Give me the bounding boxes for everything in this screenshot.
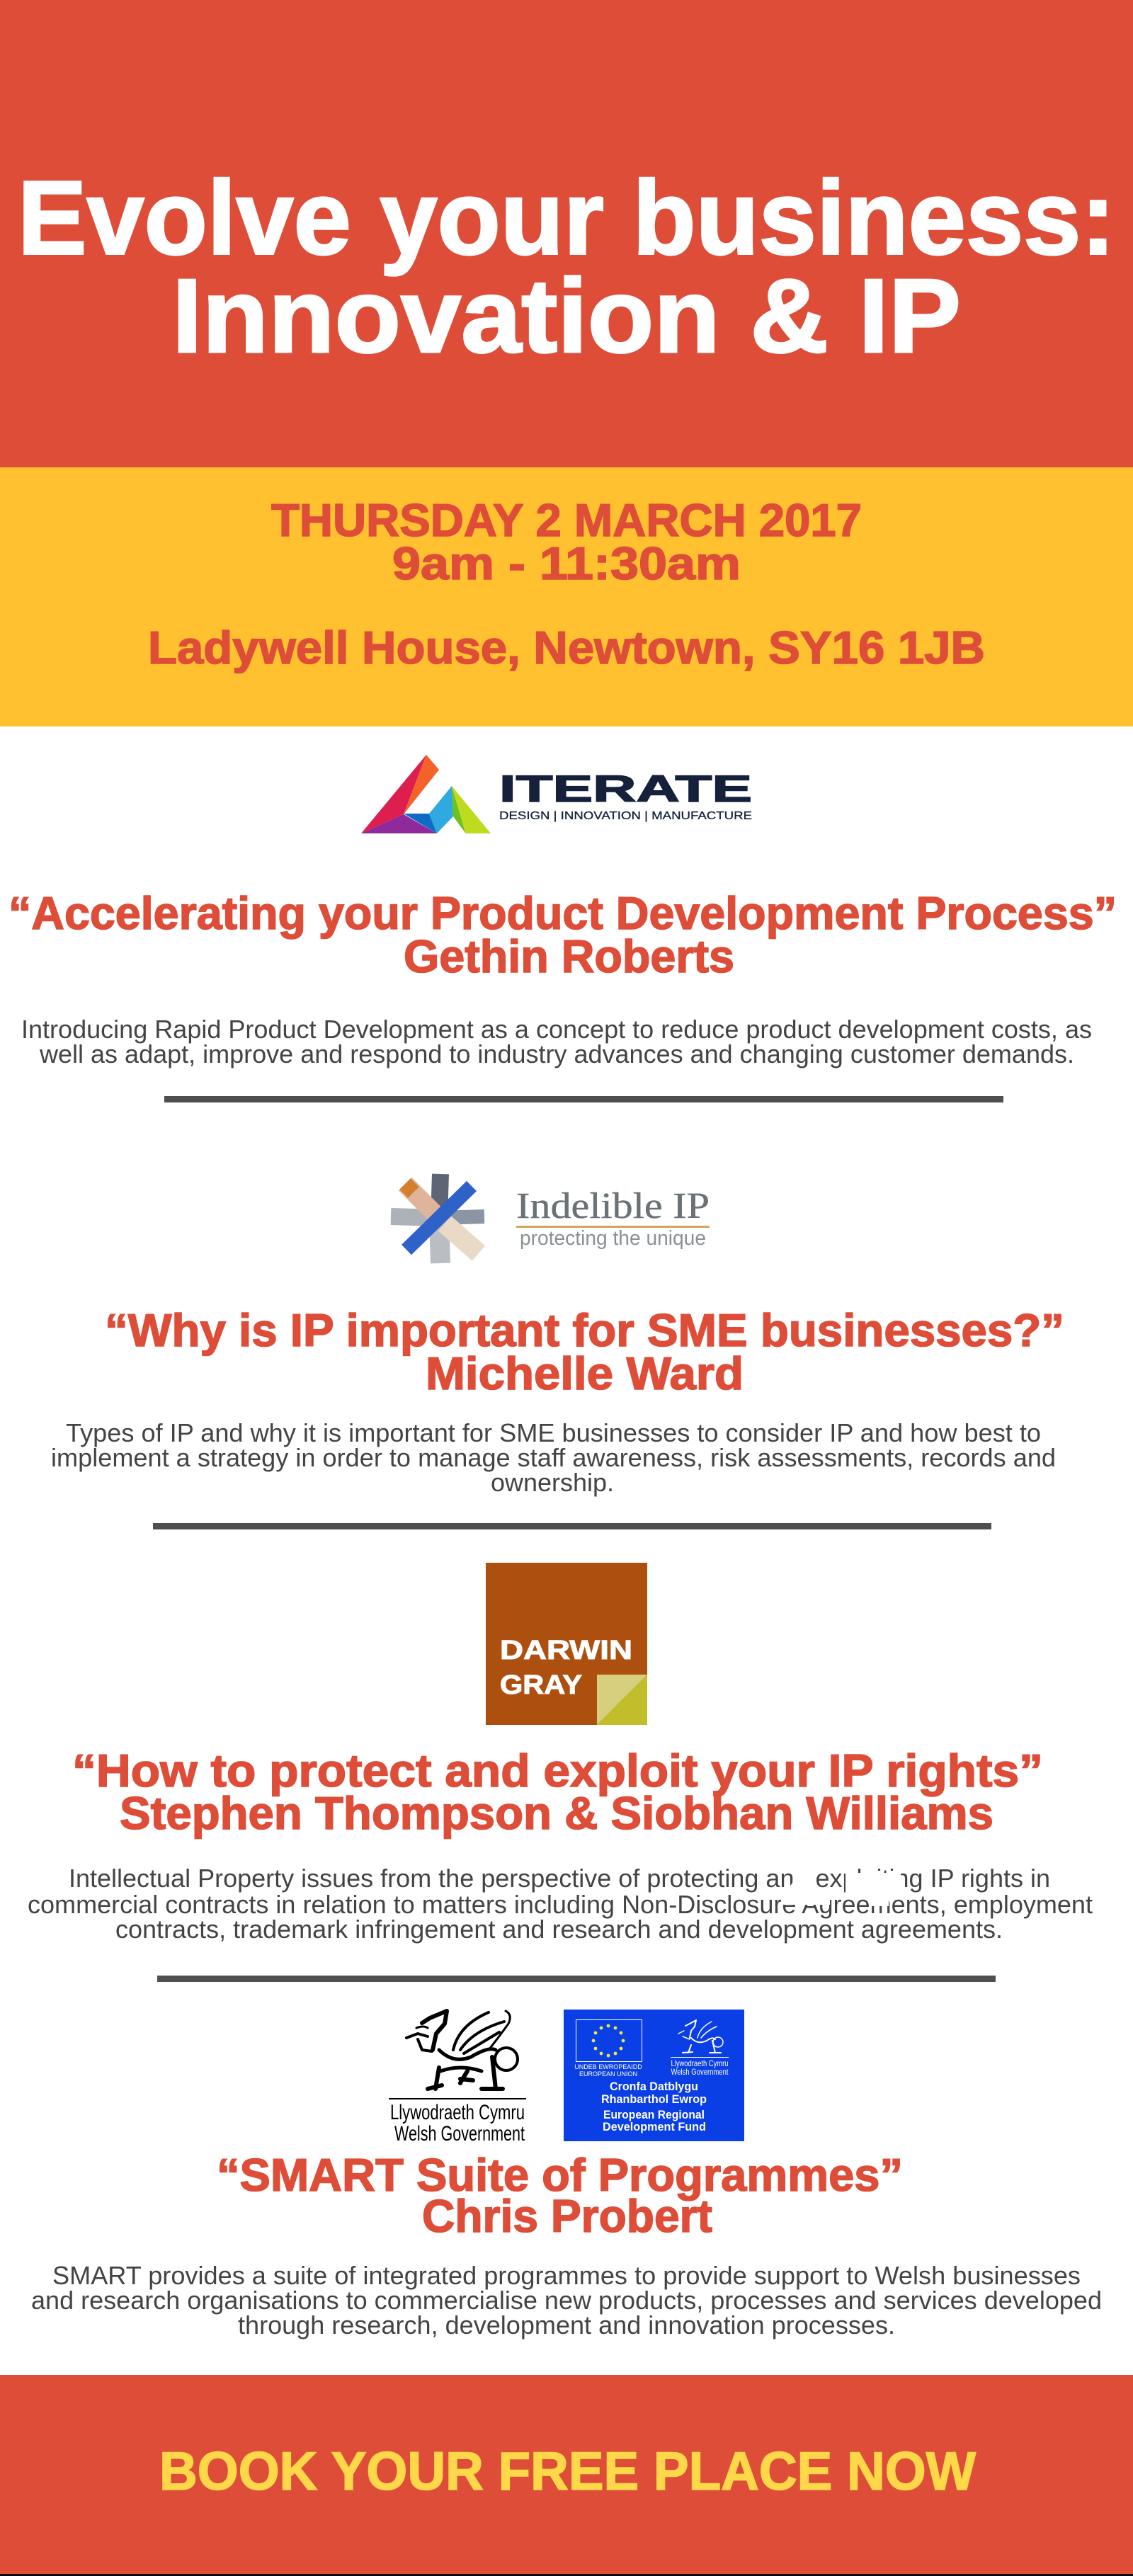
- heading: SMART talk: [217, 2149, 903, 2242]
- call to action text: BOOK YOUR FREE PLACE NOW: [159, 2441, 976, 2502]
- logo: Darwin Gray: GRAY: [500, 1670, 582, 1700]
- logo: European Regional Development Fund: UNDEB EWROPEAIDD: [574, 2063, 642, 2070]
- text: Darwin Gray talk description: Intellectual Property issues from the perspective of protecting and exploiting IP rights in: [69, 1864, 1050, 1893]
- text: Darwin Gray talk description: contracts, trademark infringement and research and development agreements.: [115, 1915, 1003, 1944]
- logo: European Regional Development Fund: European Regional: [603, 2108, 705, 2121]
- event date and time: [271, 494, 862, 589]
- panel: SMART talk: [31, 2010, 1102, 2340]
- heading: Indelible IP talk: “Why is IP important for SME businesses?”: [105, 1304, 1064, 1356]
- title: Innovation & IP: [172, 258, 961, 375]
- logo: European Regional Development Fund: Llywodraeth Cymru: [671, 2058, 728, 2068]
- logo: Welsh Government: Llywodraeth Cymru: [390, 2101, 525, 2124]
- panel: Darwin Gray talk: [28, 1563, 1093, 1944]
- logo: European Regional Development Fund: Cronfa Datblygu: [610, 2080, 698, 2093]
- heading: Iterate talk: Gethin Roberts: [404, 930, 734, 982]
- text: SMART talk description: [31, 2261, 1102, 2340]
- panel: event details: [0, 467, 1133, 726]
- heading: Darwin Gray talk: Stephen Thompson & Siobhan Williams: [120, 1787, 993, 1839]
- logo: Iterate: [361, 755, 752, 833]
- event date and time: 9am - 11:30am: [392, 537, 741, 589]
- logo: European Regional Development Fund: Rhanbarthol Ewrop: [601, 2092, 707, 2106]
- logo: Welsh Government: Welsh Government: [394, 2122, 525, 2145]
- panel: Iterate talk: [8, 755, 1117, 1068]
- panel: call to action footer: [0, 2375, 1133, 2574]
- heading: Darwin Gray talk: [72, 1745, 1043, 1839]
- heading: Iterate talk: [8, 887, 1117, 982]
- text: Indelible IP talk description: [51, 1418, 1056, 1497]
- panel: title banner: [0, 0, 1133, 467]
- heading: SMART talk: “SMART Suite of Programmes”: [217, 2149, 903, 2201]
- text: Iterate talk description: well as adapt, improve and respond to industry advances and changing customer demands.: [39, 1039, 1074, 1068]
- logo: Indelible IP: [391, 1174, 710, 1263]
- heading: SMART talk: Chris Probert: [422, 2190, 712, 2242]
- text: Indelible IP talk description: Types of IP and why it is important for SME businesses to consider IP and how best to: [66, 1418, 1041, 1447]
- text: Indelible IP talk description: implement a strategy in order to manage staff awareness, risk assessments, records and: [51, 1443, 1056, 1472]
- panel: Indelible IP talk: [51, 1174, 1064, 1497]
- logo: European Regional Development Fund: Welsh Government: [671, 2067, 729, 2077]
- event venue: Ladywell House, Newtown, SY16 1JB: [148, 622, 985, 673]
- title: [18, 160, 1115, 375]
- text: Iterate talk description: Introducing Rapid Product Development as a concept to reduce product development costs, as: [21, 1015, 1092, 1044]
- title: Evolve your business:: [18, 160, 1115, 276]
- event date and time: THURSDAY 2 MARCH 2017: [271, 494, 862, 546]
- heading: Indelible IP talk: [105, 1304, 1064, 1399]
- logo: Iterate: ITERATE: [499, 768, 752, 810]
- text: SMART talk description: through research, development and innovation processes.: [238, 2310, 895, 2340]
- logo: Darwin Gray: DARWIN: [500, 1636, 632, 1665]
- logo: Indelible IP: protecting the unique: [520, 1227, 706, 1250]
- heading: Indelible IP talk: Michelle Ward: [426, 1347, 744, 1399]
- heading: Iterate talk: “Accelerating your Product Development Process”: [8, 887, 1117, 939]
- logo: Welsh Government: [389, 2011, 526, 2145]
- logo: European Regional Development Fund: Development Fund: [603, 2120, 706, 2133]
- logo: Iterate: DESIGN | INNOVATION | MANUFACTURE: [499, 810, 752, 822]
- text: Darwin Gray talk description: commercial contracts in relation to matters including Non-Disclosure Agreements, employment: [28, 1890, 1093, 1919]
- text: Darwin Gray talk description: [28, 1864, 1093, 1944]
- text: Indelible IP talk description: ownership.: [491, 1468, 614, 1497]
- logo: European Regional Development Fund: EUROPEAN UNION: [579, 2070, 637, 2078]
- heading: Darwin Gray talk: “How to protect and exploit your IP rights”: [72, 1745, 1043, 1796]
- logo: European Regional Development Fund: [564, 2010, 744, 2141]
- logo: Indelible IP: Indelible IP: [516, 1186, 710, 1226]
- logo: Darwin Gray: [486, 1563, 647, 1725]
- text: SMART talk description: SMART provides a suite of integrated programmes to provide support to Welsh businesses: [52, 2261, 1081, 2290]
- text: Iterate talk description: [21, 1015, 1092, 1068]
- text: SMART talk description: and research organisations to commercialise new products, processes and services developed: [31, 2286, 1102, 2315]
